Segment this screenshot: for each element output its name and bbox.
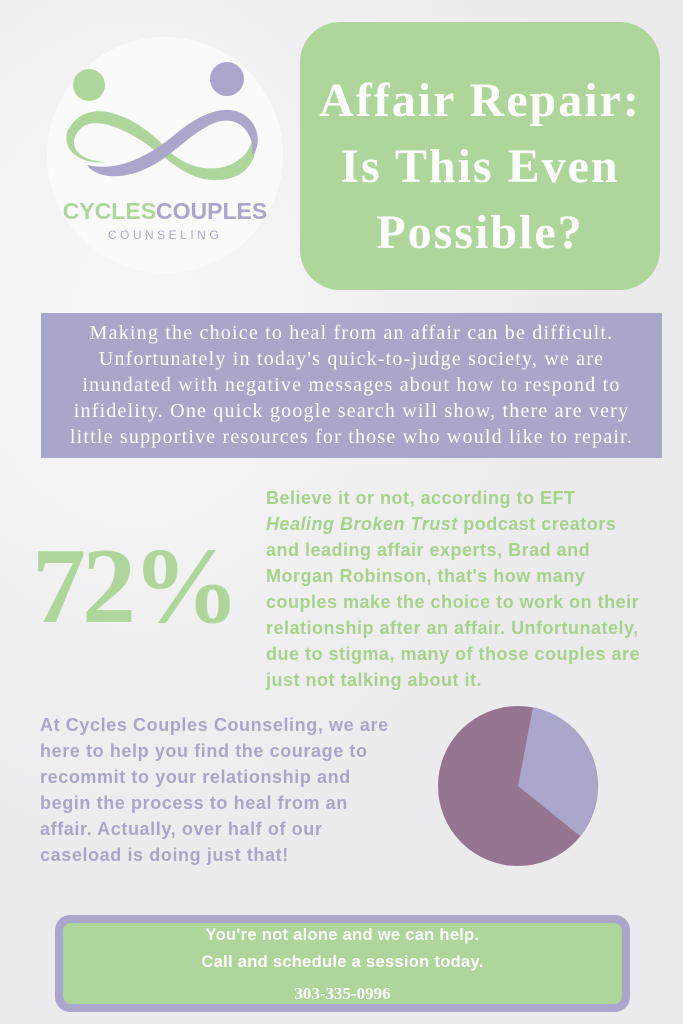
caseload text: caseload is doing just that! [40,845,289,865]
call to action box: 303-335-0996 [294,984,391,1003]
intro text box: inundated with negative messages about how to respond to [82,374,621,396]
statistic text: couples make the choice to work on their [266,592,639,612]
logo: COUNSELING [108,228,222,242]
intro text box: little supportive resources for those who would like to repair. [70,426,633,448]
statistic text: Believe it or not, according to EFT [266,488,576,508]
statistic text: Morgan Robinson, that's how many [266,566,585,586]
statistic text: relationship after an affair. Unfortunately, [266,618,639,638]
statistic text: Healing Broken Trust podcast creators [266,514,616,534]
call to action box: You're not alone and we can help. [206,926,479,944]
logo text: CYCLESCOUPLES [63,198,267,224]
caseload text [40,715,389,865]
title box: Is This Even [340,140,620,193]
caseload text: begin the process to heal from an [40,793,348,813]
logo [47,37,283,273]
caseload text: At Cycles Couples Counseling, we are [40,715,389,735]
pie chart [438,706,598,866]
title box: Affair Repair: [319,74,641,127]
caseload text: here to help you find the courage to [40,741,368,761]
call to action box: Call and schedule a session today. [201,953,484,971]
call to action box [55,915,630,1012]
intro text box: Unfortunately in today's quick-to-judge society, we are [99,348,604,370]
intro text box: Making the choice to heal from an affair can be difficult. [90,322,613,344]
statistic text: just not talking about it. [266,670,482,690]
title box: Possible? [376,206,584,259]
statistic text [266,488,640,690]
statistic text: and leading affair experts, Brad and [266,540,590,560]
caseload text: affair. Actually, over half of our [40,819,322,839]
intro text box: infidelity. One quick google search will show, there are very [74,400,629,422]
statistic text: due to stigma, many of those couples are [266,644,640,664]
statistic 72%: 72% [32,527,236,646]
title box [300,22,660,290]
intro text box [41,313,662,458]
caseload text: recommit to your relationship and [40,767,351,787]
icon: infinity figures [66,62,258,180]
